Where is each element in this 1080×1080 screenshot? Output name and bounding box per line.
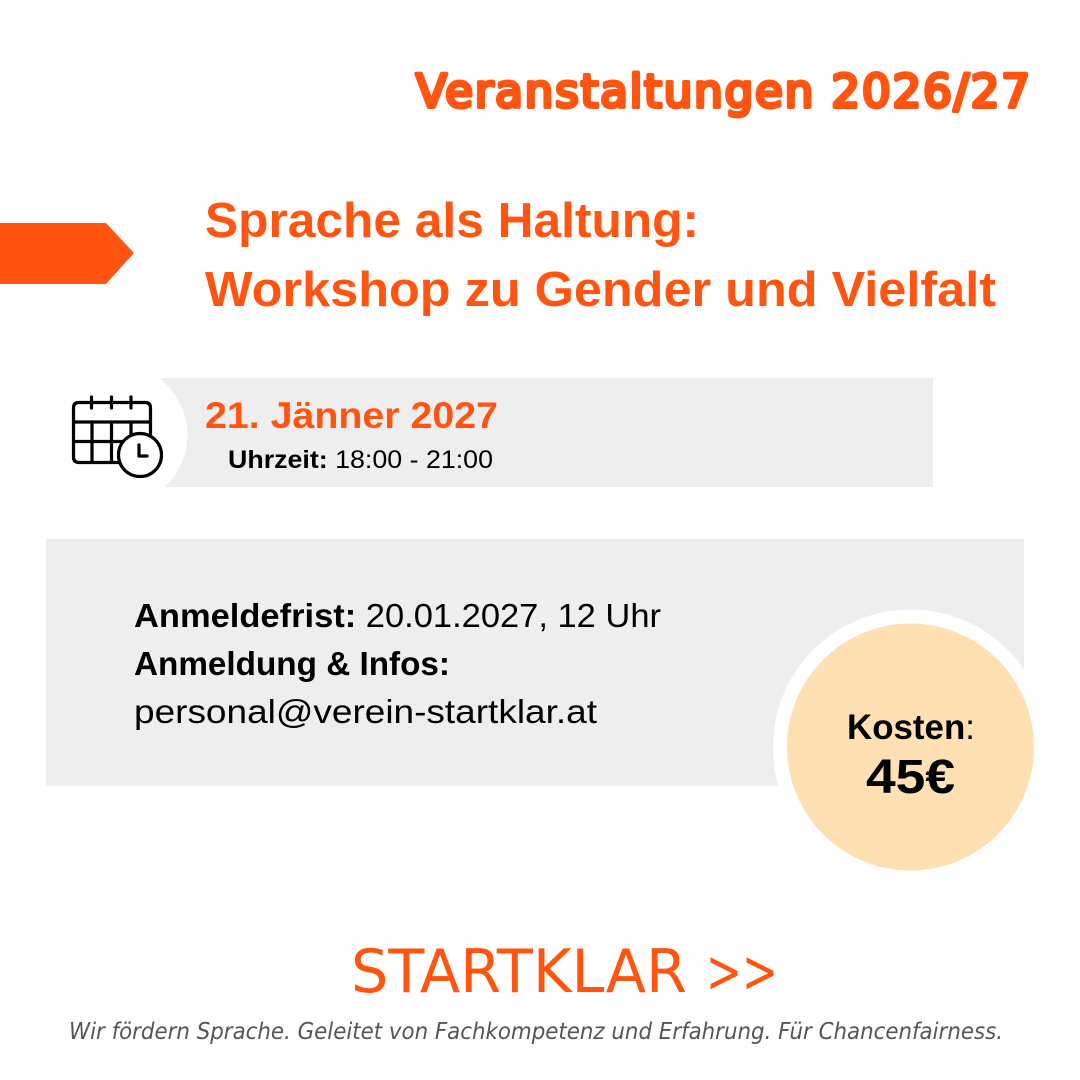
logo wordmark: >>	[706, 937, 778, 1007]
logo wordmark: STARTKLAR	[351, 937, 687, 1007]
date: 21. Jänner 2027	[205, 395, 498, 436]
workshop heading	[205, 194, 996, 317]
date panel	[46, 364, 933, 506]
cost badge	[773, 610, 1048, 884]
registration panel	[46, 539, 1024, 786]
cost badge: 45€	[866, 751, 955, 804]
registration details	[134, 597, 661, 730]
workshop heading: Workshop zu Gender und Vielfalt	[205, 263, 996, 317]
registration details: Anmeldefrist: 20.01.2027, 12 Uhr	[134, 597, 661, 634]
title: Veranstaltungen 2026/27	[416, 65, 1030, 118]
arrow	[0, 223, 134, 284]
time: Uhrzeit: 18:00 - 21:00	[228, 446, 493, 474]
workshop heading: Sprache als Haltung:	[205, 194, 699, 248]
registration details: Anmeldung & Infos:	[134, 645, 450, 682]
cost badge: Kosten:	[847, 708, 975, 747]
icon: calendar with clock	[74, 397, 162, 476]
tagline: Wir fördern Sprache. Geleitet von Fachkompetenz und Erfahrung. Für Chancenfairness.	[69, 1019, 1003, 1045]
registration details: personal@verein-startklar.at	[134, 693, 597, 730]
